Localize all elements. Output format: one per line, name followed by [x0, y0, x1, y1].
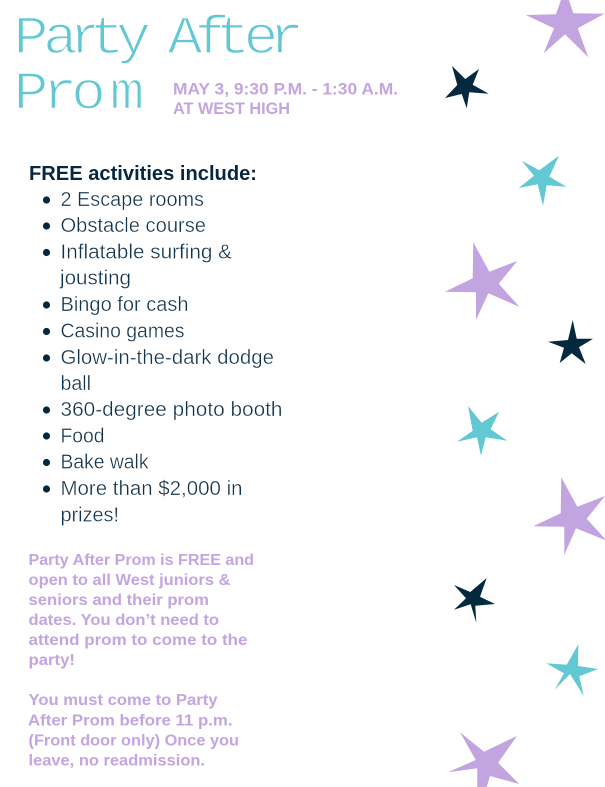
title: Prom — [14, 63, 145, 125]
activities list: Bake walk — [60, 452, 149, 474]
icon: teal star, middle — [457, 406, 507, 456]
icon: navy star, top — [445, 66, 489, 108]
activities list: Inflatable surfing & — [60, 242, 233, 264]
entry rules paragraph: You must come to Party — [28, 692, 218, 709]
activities list: Food — [60, 426, 104, 448]
icon: purple star, top — [526, 0, 604, 57]
eligibility paragraph — [28, 552, 254, 669]
activities list: Glow-in-the-dark dodge — [60, 347, 274, 369]
icon: navy star, middle — [548, 320, 593, 364]
icon: teal star, lower — [546, 644, 598, 696]
date and location: AT WEST HIGH — [173, 99, 290, 118]
date and location — [173, 80, 398, 118]
activities list: Casino games — [60, 320, 184, 342]
entry rules paragraph: After Prom before 11 p.m. — [28, 712, 232, 730]
icon: teal star, top — [519, 156, 567, 206]
icon: navy star, lower — [454, 578, 495, 623]
activities list: prizes! — [60, 504, 119, 526]
activities list: ball — [60, 373, 91, 395]
activities heading: FREE activities include: — [29, 162, 257, 185]
activities list: jousting — [59, 268, 131, 290]
activities list: More than $2,000 in — [60, 478, 242, 500]
activities list: Bingo for cash — [60, 294, 188, 316]
title — [14, 8, 304, 125]
entry rules paragraph: leave, no readmission. — [28, 752, 205, 770]
entry rules paragraph: (Front door only) Once you — [28, 732, 239, 750]
eligibility paragraph: open to all West juniors & — [28, 572, 230, 589]
activities list — [43, 189, 283, 526]
eligibility paragraph: party! — [28, 652, 75, 669]
activities list: 2 Escape rooms — [60, 189, 204, 211]
icon: purple star, upper middle — [445, 242, 519, 320]
eligibility paragraph: dates. You don’t need to — [28, 612, 219, 629]
eligibility paragraph: seniors and their prom — [28, 592, 209, 609]
eligibility paragraph: Party After Prom is FREE and — [28, 552, 254, 569]
entry rules paragraph — [28, 692, 239, 770]
activities list: 360-degree photo booth — [60, 399, 282, 421]
eligibility paragraph: attend prom to come to the — [28, 632, 248, 649]
activities list: Obstacle course — [60, 215, 206, 237]
icon: purple star, bottom — [448, 732, 519, 787]
date and location: MAY 3, 9:30 P.M. - 1:30 A.M. — [173, 80, 398, 98]
icon: purple star, lower middle — [533, 477, 605, 555]
title: Party After — [14, 8, 304, 69]
